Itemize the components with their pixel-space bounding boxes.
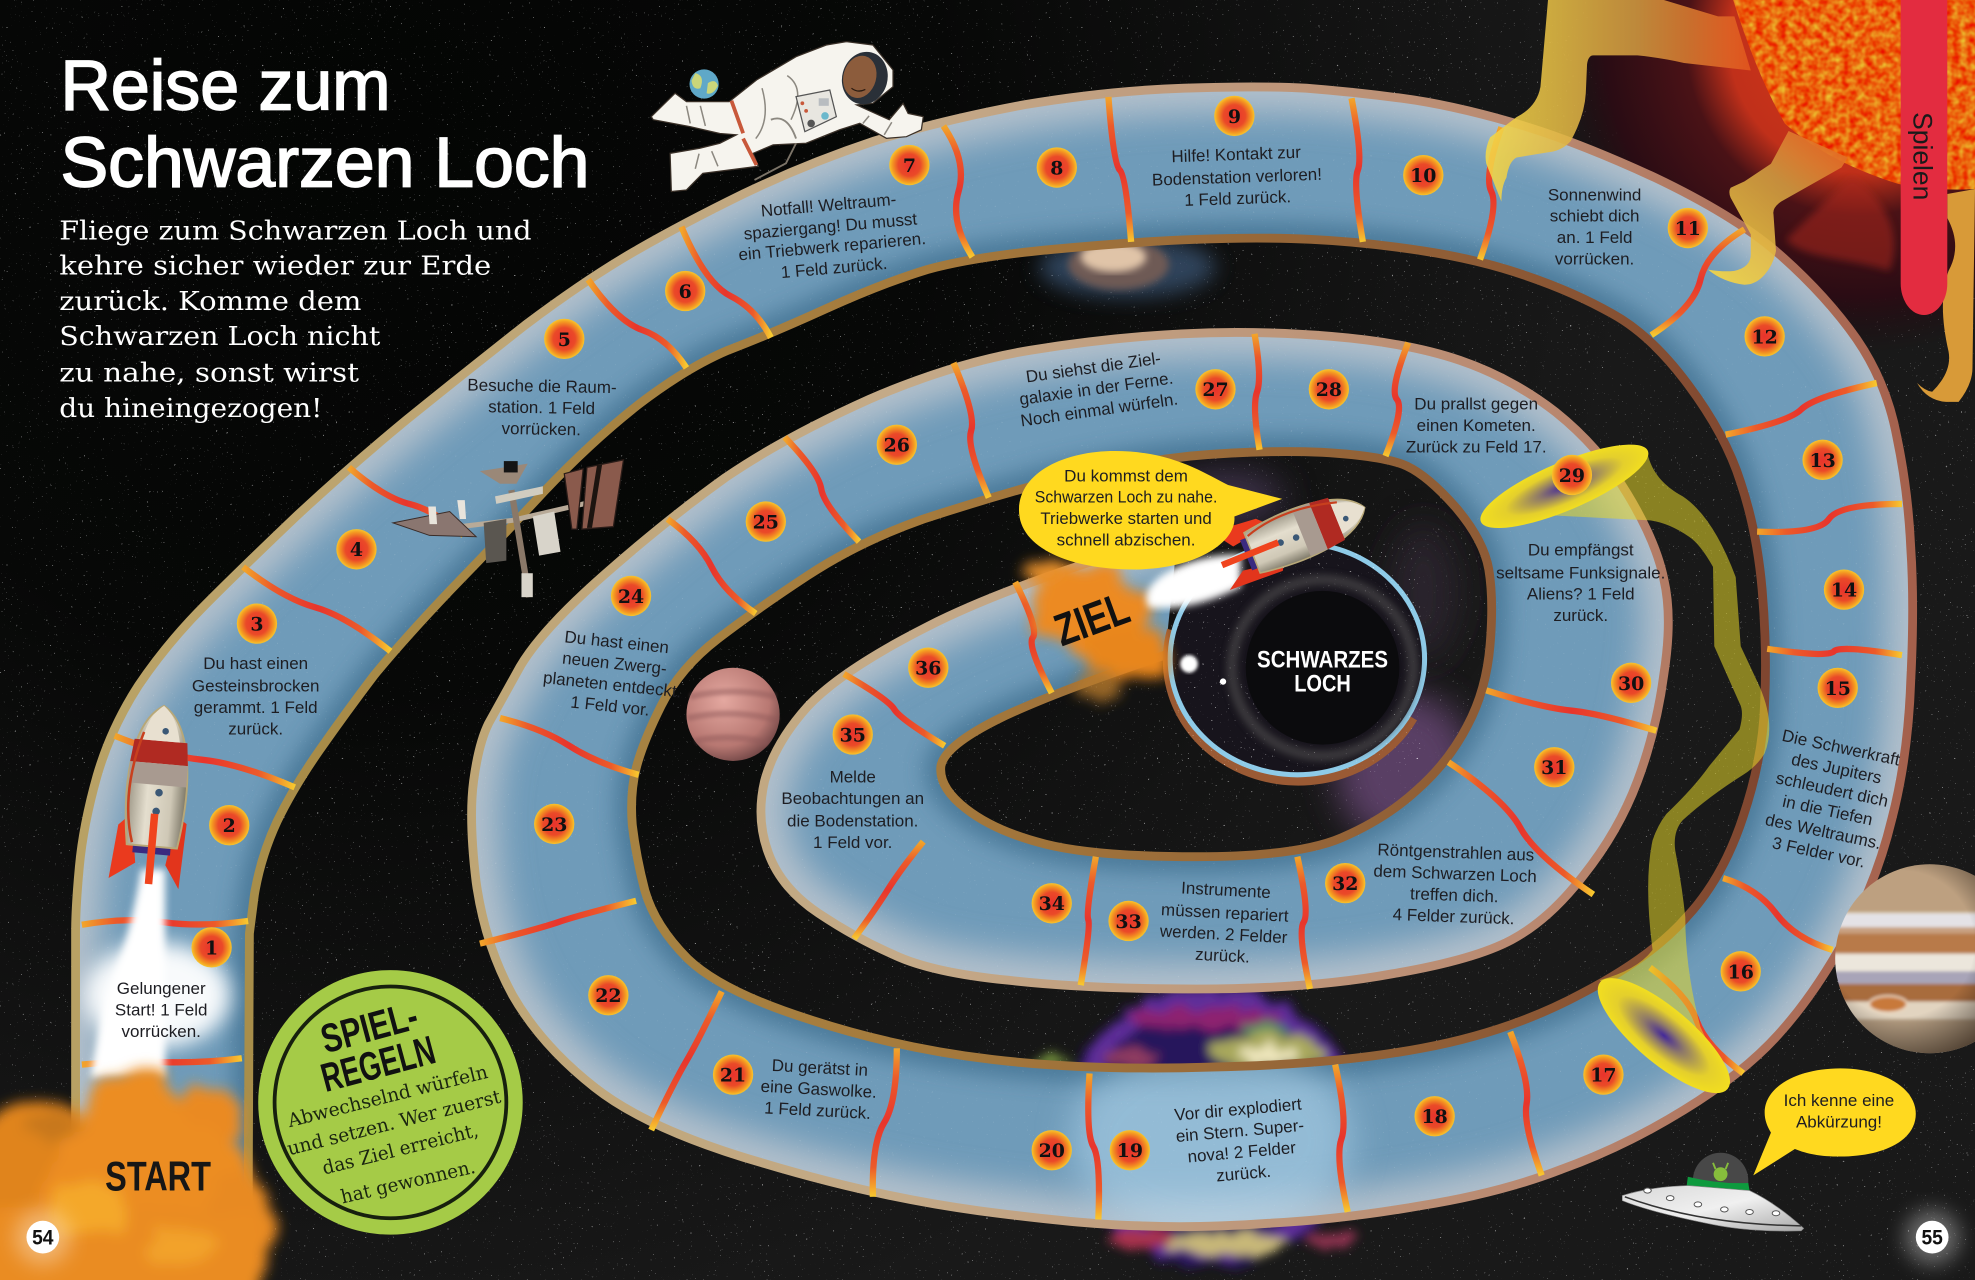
field text: 35: 1 Feld vor. bbox=[813, 833, 892, 852]
field text: 21: Du gerätst in bbox=[771, 1056, 868, 1080]
field text: 7: 1 Feld zurück. bbox=[780, 254, 888, 282]
field text: 35: die Bodenstation. bbox=[787, 811, 918, 830]
field text: 19: nova! 2 Felder bbox=[1187, 1138, 1297, 1166]
field text: 30: Aliens? 1 Feld bbox=[1527, 585, 1635, 604]
tab label: Spielen bbox=[1907, 112, 1937, 200]
page number 55: 55 bbox=[1921, 1226, 1943, 1250]
field text: 35 bbox=[781, 767, 924, 852]
field text: 7: spaziergang! Du musst bbox=[743, 210, 918, 244]
field text: 33: Instrumente bbox=[1181, 878, 1271, 902]
start rocket exhaust bbox=[91, 869, 165, 1077]
field text: 7 bbox=[734, 188, 929, 286]
field number badges 1 to 36: 8 bbox=[1050, 157, 1063, 179]
dwarf planet bbox=[686, 668, 780, 761]
field text: 29: Du prallst gegen bbox=[1414, 394, 1538, 413]
field text: 15: des Jupiters bbox=[1790, 750, 1883, 788]
page number 54: 54 bbox=[32, 1226, 54, 1250]
field text: 9: Hilfe! Kontakt zur bbox=[1171, 143, 1301, 166]
speech bubble: black hole warning: Du kommst dem bbox=[1064, 466, 1188, 485]
field text: 5: vorrücken. bbox=[501, 419, 581, 439]
speech bubble: alien shortcut: Ich kenne eine bbox=[1784, 1091, 1894, 1110]
field text: 7: Notfall! Weltraum- bbox=[760, 190, 897, 221]
field text: 33 bbox=[1157, 877, 1290, 969]
field text: 21: eine Gaswolke. bbox=[760, 1077, 877, 1102]
field text: 27: galaxie in der Ferne. bbox=[1018, 369, 1174, 409]
solar flare over fields 11 and 12 bbox=[1708, 131, 1848, 285]
field text: 30: seltsame Funksignale. bbox=[1496, 563, 1665, 582]
field number badges 1 to 36: 26 bbox=[884, 435, 910, 457]
field text: 1: vorrücken. bbox=[122, 1022, 201, 1041]
rules heading: SPIEL- bbox=[316, 993, 423, 1062]
field number badges 1 to 36: 23 bbox=[541, 814, 567, 836]
field number badges 1 to 36: 5 bbox=[558, 329, 571, 351]
field text: 19: ein Stern. Super- bbox=[1175, 1116, 1305, 1146]
intro text: kehre sicher wieder zur Erde bbox=[59, 251, 491, 282]
field text: 30: zurück. bbox=[1553, 606, 1608, 625]
field text: 1: Start! 1 Feld bbox=[115, 1000, 208, 1019]
field text: 27: Noch einmal würfeln. bbox=[1019, 390, 1179, 430]
title: Reise zum bbox=[60, 46, 390, 125]
field text: 3: Gesteinsbrocken bbox=[192, 677, 319, 696]
rules text: hat gewonnen. bbox=[339, 1156, 477, 1208]
field number badges 1 to 36: 11 bbox=[1675, 218, 1701, 240]
start label: START bbox=[105, 1153, 211, 1200]
black hole label bbox=[1257, 647, 1388, 698]
galaxy behind the track bbox=[1039, 237, 1215, 297]
flying saucer with alien bbox=[1622, 1153, 1804, 1231]
field number badges 1 to 36: 22 bbox=[595, 985, 622, 1007]
field text: 32: dem Schwarzen Loch bbox=[1373, 862, 1537, 886]
speech bubble: black hole warning: Triebwerke starten und bbox=[1040, 509, 1212, 528]
field number badges 1 to 36: 21 bbox=[720, 1065, 746, 1087]
field number badges 1 to 36: 27 bbox=[1202, 379, 1229, 401]
field text: 27 bbox=[1013, 347, 1179, 430]
field number badges 1 to 36: 4 bbox=[350, 539, 363, 561]
field text: 24: Du hast einen bbox=[564, 627, 670, 657]
nebula in the centre bbox=[1159, 470, 1474, 844]
field number badges 1 to 36: 32 bbox=[1332, 873, 1358, 895]
intro text: du hineingezogen! bbox=[59, 393, 322, 424]
field text: 35: Beobachtungen an bbox=[781, 789, 924, 808]
field number badges 1 to 36: 33 bbox=[1115, 911, 1142, 933]
field number badges 1 to 36: 20 bbox=[1039, 1140, 1065, 1162]
field number badges 1 to 36: 10 bbox=[1410, 165, 1436, 187]
field number badges 1 to 36: 2 bbox=[223, 815, 236, 837]
field text: 15: des Weltraums. bbox=[1764, 810, 1883, 853]
rules text bbox=[285, 1061, 503, 1208]
intro text bbox=[59, 215, 532, 424]
field text: 1: Gelungener bbox=[117, 979, 206, 998]
field text: 24: planeten entdeckt. bbox=[542, 668, 682, 702]
field text: 15: in die Tiefen bbox=[1781, 792, 1874, 829]
field number badges 1 to 36: 16 bbox=[1728, 961, 1754, 983]
field text: 33: müssen repariert bbox=[1161, 900, 1289, 926]
field text: 1 bbox=[115, 979, 208, 1041]
finish label ZIEL: ZIEL bbox=[1048, 582, 1136, 656]
field text: 3 bbox=[192, 654, 319, 738]
field text: 3: gerammt. 1 Feld bbox=[194, 698, 318, 717]
rules heading bbox=[316, 993, 440, 1101]
speech bubble: black hole warning: Schwarzen Loch zu nahe. bbox=[1035, 488, 1217, 507]
field number badges 1 to 36: 1 bbox=[205, 937, 218, 959]
field text: 32 bbox=[1372, 840, 1538, 929]
intro text: zurück. Komme dem bbox=[59, 286, 361, 317]
field number badges 1 to 36: 36 bbox=[915, 658, 941, 680]
field text: 15 bbox=[1758, 726, 1902, 874]
page number 55 bbox=[1904, 1209, 1960, 1265]
field text: 7: ein Triebwerk reparieren. bbox=[738, 229, 927, 264]
field text: 29 bbox=[1406, 394, 1547, 456]
field number badges 1 to 36: 17 bbox=[1590, 1065, 1617, 1087]
field number badges 1 to 36: 15 bbox=[1825, 678, 1851, 700]
field text: 19 bbox=[1173, 1095, 1308, 1189]
field number badges 1 to 36: 34 bbox=[1039, 893, 1065, 915]
field text: 19: zurück. bbox=[1215, 1162, 1272, 1185]
wormhole shortcut from field 16 to field 29 bbox=[1472, 429, 1769, 1110]
astronaut with small Earth bbox=[651, 42, 923, 191]
black hole bbox=[1167, 543, 1425, 781]
field number badges 1 to 36: 6 bbox=[679, 281, 692, 303]
sun with corona bbox=[1562, 0, 1975, 416]
intro text: Schwarzen Loch nicht bbox=[59, 321, 381, 352]
title bbox=[60, 46, 589, 201]
field text: 32: treffen dich. bbox=[1410, 884, 1499, 906]
field text: 9: Bodenstation verloren! bbox=[1152, 165, 1322, 190]
rules heading: REGELN bbox=[316, 1027, 440, 1101]
orange cloud at ZIEL bbox=[1023, 559, 1165, 694]
black hole label: SCHWARZES bbox=[1257, 647, 1388, 674]
intro text: Fliege zum Schwarzen Loch und bbox=[59, 215, 532, 246]
field text: 3: Du hast einen bbox=[203, 654, 308, 673]
orange launch cloud bbox=[0, 1067, 272, 1280]
field text: 24: neuen Zwerg- bbox=[561, 649, 668, 678]
field number badges 1 to 36: 28 bbox=[1316, 379, 1342, 401]
field text: 15: 3 Felder vor. bbox=[1771, 833, 1867, 872]
field text: 29: einen Kometen. bbox=[1417, 416, 1536, 435]
field text: 21 bbox=[759, 1055, 878, 1123]
field text: 35: Melde bbox=[830, 767, 876, 786]
field text: 15: Die Schwerkraft bbox=[1780, 726, 1902, 770]
field number badges 1 to 36: 19 bbox=[1117, 1140, 1143, 1162]
speech bubble: black hole warning bbox=[1019, 451, 1282, 569]
field text: 19: Vor dir explodiert bbox=[1174, 1095, 1303, 1125]
field text: 11: vorrücken. bbox=[1555, 250, 1634, 269]
field number badges 1 to 36: 24 bbox=[618, 586, 644, 608]
field text: 30: Du empfängst bbox=[1528, 541, 1634, 560]
rules text: das Ziel erreicht, bbox=[320, 1119, 481, 1179]
field text: 11: an. 1 Feld bbox=[1557, 228, 1632, 247]
space station bbox=[393, 460, 623, 597]
field text: 21: 1 Feld zurück. bbox=[764, 1098, 871, 1123]
field text: 32: 4 Felder zurück. bbox=[1392, 905, 1515, 928]
field text: 5 bbox=[466, 376, 617, 440]
field text: 33: zurück. bbox=[1195, 945, 1250, 967]
speech bubble: alien shortcut bbox=[1753, 1068, 1916, 1175]
icon: Earth bbox=[689, 69, 719, 99]
field number badges 1 to 36: 7 bbox=[903, 155, 916, 177]
black hole label: LOCH bbox=[1294, 671, 1351, 698]
field number badges 1 to 36: 30 bbox=[1618, 673, 1644, 695]
field number badges 1 to 36: 18 bbox=[1422, 1106, 1448, 1128]
field text: 11 bbox=[1548, 185, 1641, 269]
field text: 24: 1 Feld vor. bbox=[570, 693, 650, 720]
field number badges 1 to 36: 29 bbox=[1559, 465, 1585, 487]
speech bubble: black hole warning: schnell abzischen. bbox=[1057, 531, 1196, 550]
speech bubble: alien shortcut: Abkürzung! bbox=[1796, 1113, 1882, 1132]
start rocket bbox=[108, 702, 197, 889]
field text: 11: Sonnenwind bbox=[1548, 185, 1641, 204]
field text: 3: zurück. bbox=[228, 719, 283, 738]
field text: 29: Zurück zu Feld 17. bbox=[1406, 437, 1547, 456]
field number badges 1 to 36: 9 bbox=[1228, 106, 1241, 128]
field number badges 1 to 36: 35 bbox=[840, 724, 866, 746]
field text: 32: Röntgenstrahlen aus bbox=[1377, 840, 1535, 865]
right solar flare bbox=[1917, 189, 1975, 402]
field number badges 1 to 36: 12 bbox=[1752, 326, 1778, 348]
supernova behind the track bbox=[1034, 984, 1360, 1266]
field text: 15: schleudert dich bbox=[1774, 768, 1890, 811]
intro text: zu nahe, sonst wirst bbox=[59, 358, 359, 389]
Jupiter bbox=[1835, 864, 1975, 1054]
page number 54 bbox=[15, 1209, 71, 1265]
field number badges 1 to 36 bbox=[191, 96, 1864, 1170]
rules text: Abwechselnd würfeln bbox=[285, 1061, 490, 1132]
field text: 9: 1 Feld zurück. bbox=[1184, 187, 1291, 210]
field text: 24 bbox=[540, 626, 687, 723]
field text: 33: werden. 2 Felder bbox=[1158, 921, 1288, 947]
solar flare over fields 10 and 11 bbox=[1486, 0, 1751, 202]
red section tab bbox=[1901, 0, 1947, 315]
panel: game rules stamp bbox=[258, 970, 523, 1235]
field number badges 1 to 36: 3 bbox=[250, 614, 264, 636]
field number badges 1 to 36: 25 bbox=[753, 512, 779, 534]
field text: 9 bbox=[1151, 142, 1323, 211]
field text: 5: Besuche die Raum- bbox=[467, 376, 617, 397]
title: Schwarzen Loch bbox=[60, 122, 589, 201]
rules text: und setzen. Wer zuerst bbox=[285, 1086, 503, 1160]
field number badges 1 to 36: 13 bbox=[1809, 450, 1836, 472]
field text: 27: Du siehst die Ziel- bbox=[1025, 349, 1162, 386]
rocket exhaust at black hole bbox=[1146, 554, 1241, 608]
field text: 30 bbox=[1496, 541, 1665, 625]
field number badges 1 to 36: 14 bbox=[1831, 580, 1857, 602]
field number badges 1 to 36: 31 bbox=[1541, 757, 1567, 779]
field text: 5: station. 1 Feld bbox=[488, 397, 595, 418]
field text: 11: schiebt dich bbox=[1550, 207, 1639, 226]
rocket near the black hole bbox=[1207, 475, 1375, 592]
